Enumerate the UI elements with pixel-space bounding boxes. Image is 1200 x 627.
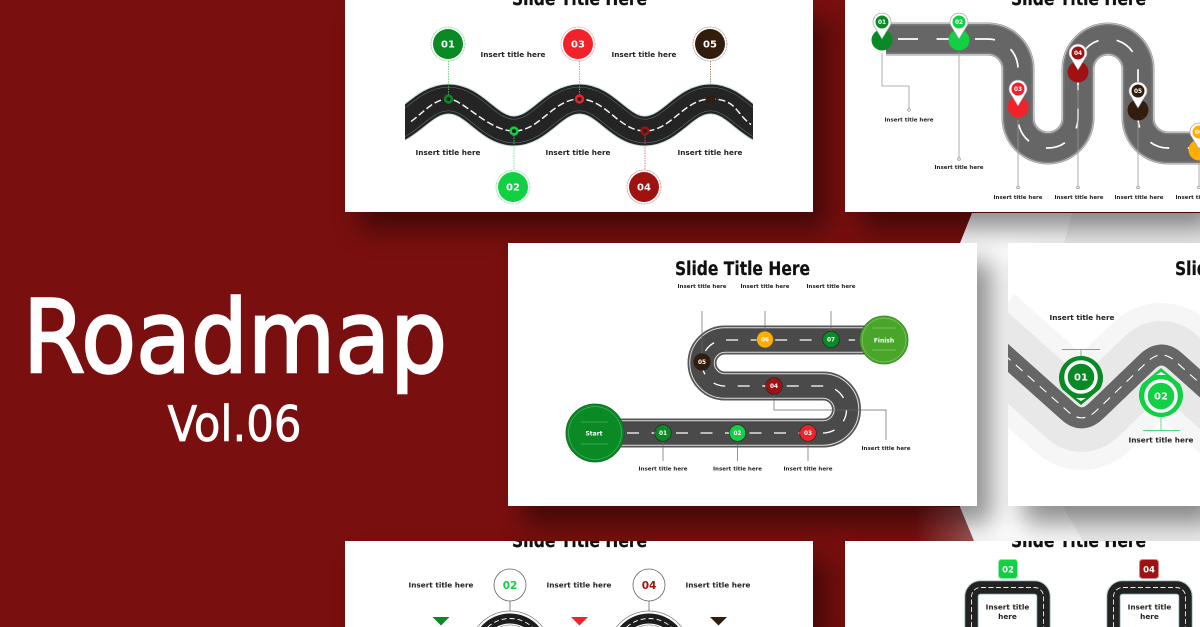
labels [1050, 313, 1194, 444]
circular road 02 [478, 611, 542, 627]
node 03 [800, 425, 816, 441]
labels: Insert title here [1114, 195, 1164, 201]
labels: Insert title here [806, 284, 856, 290]
pin 02 [948, 13, 970, 51]
volume number: Vol.06 [168, 396, 302, 453]
pin 01 [872, 13, 892, 51]
node 01 [655, 425, 671, 441]
leader lines [882, 52, 1199, 187]
badge 02 [496, 170, 530, 204]
frame text 04: Insert title [1128, 602, 1171, 612]
panel: zigzag road slide (right) [1008, 243, 1200, 506]
badge 05 [693, 27, 727, 61]
badge 03 [561, 27, 595, 61]
badge 04 [627, 170, 661, 204]
badge 02 [494, 569, 526, 611]
badge 01: 01 [441, 40, 455, 51]
pin 02 [1139, 368, 1183, 430]
frame text 04 [1128, 602, 1171, 621]
labels: Insert title here [713, 466, 762, 472]
road frame 02 [972, 588, 1044, 627]
S-curve road [595, 340, 884, 433]
start circle: Start [585, 430, 603, 438]
labels: Insert title here [1128, 436, 1194, 444]
node 02 [729, 425, 746, 441]
triangle markers [432, 617, 727, 626]
labels: Insert title here [994, 195, 1043, 201]
labels: Insert title here [612, 50, 677, 59]
tag 04: 04 [1143, 566, 1155, 576]
node 07 [823, 331, 839, 348]
labels: Insert title here [784, 466, 833, 472]
badge 04 [633, 569, 665, 611]
labels: Insert title here [546, 148, 611, 157]
badge 04: 04 [642, 580, 656, 592]
panel: wavy road slide [345, 0, 813, 212]
panel: framed road slide (bottom right) [845, 541, 1200, 627]
winding road [886, 39, 1200, 148]
panel: circular road slide (bottom left) [345, 541, 813, 627]
heading: Roadmap Vol.06 [23, 278, 447, 453]
pin 02: 02 [955, 20, 963, 26]
node 04: 04 [770, 384, 778, 390]
pin 04: 04 [1074, 51, 1082, 57]
node 05 [694, 354, 710, 370]
tag 02 [998, 560, 1018, 578]
labels: Insert title here [740, 284, 790, 290]
badge 04: 04 [637, 183, 651, 194]
node 06: 06 [761, 338, 769, 344]
circular road 04 [616, 611, 682, 627]
badge 05: 05 [703, 40, 717, 51]
labels: Insert title here [1054, 195, 1104, 201]
leader end dots [908, 109, 1200, 189]
labels: Insert title here [546, 581, 612, 590]
pin 01: 01 [878, 20, 886, 26]
labels: Insert title here [1050, 313, 1115, 322]
finish circle: Finish [874, 338, 894, 344]
frame text 02 [986, 602, 1029, 621]
labels: Insert title here [480, 50, 546, 59]
pin 05: 05 [1134, 89, 1142, 95]
node 04 [766, 378, 782, 394]
road frame 04 [1114, 588, 1186, 627]
pin 03: 03 [1014, 87, 1022, 93]
frame text 04: here [1140, 612, 1159, 621]
labels [884, 118, 1200, 201]
node 06 [757, 331, 773, 348]
badge 03: 03 [571, 40, 585, 51]
labels: Insert title here [678, 284, 727, 290]
node 02: 02 [733, 431, 742, 437]
frame text 02: here [998, 612, 1017, 621]
labels [408, 581, 751, 590]
pin 02: 02 [1154, 392, 1168, 403]
labels [416, 50, 743, 157]
node 05: 05 [698, 360, 706, 366]
panel: winding grey road slide [845, 0, 1200, 212]
pin 01: 01 [1074, 373, 1088, 384]
pin 03 [1008, 80, 1028, 118]
finish circle [860, 316, 908, 364]
labels: Insert title here [934, 165, 984, 171]
frame text 02: Insert title [986, 602, 1029, 612]
slide title: Slide Title Here [675, 259, 810, 280]
labels: Insert title here [884, 118, 934, 124]
tag 02: 02 [1002, 566, 1014, 576]
tag 04 [1140, 560, 1158, 578]
labels: Insert title here [408, 581, 474, 590]
badge 02: 02 [503, 580, 517, 592]
road markers [445, 96, 714, 134]
connector lines [448, 61, 710, 170]
labels: Insert title here [862, 446, 911, 452]
badge 01 [431, 27, 465, 61]
labels [638, 284, 911, 472]
node 01: 01 [659, 431, 667, 437]
pin 01 [1059, 350, 1103, 405]
pin 05 [1128, 82, 1148, 120]
title word: Roadmap [23, 278, 447, 396]
wavy road [382, 99, 776, 131]
node 03: 03 [804, 431, 812, 437]
badge 02: 02 [506, 183, 520, 194]
labels: Insert title here [638, 466, 688, 472]
zigzag road with bands [980, 333, 1200, 437]
labels: Insert title here [416, 148, 481, 157]
panel: S-curve road slide (centre) [508, 243, 977, 506]
leader lines [663, 311, 886, 461]
pin 06 [1188, 123, 1200, 160]
labels: Insert title here [686, 581, 751, 590]
labels: Insert title here [678, 148, 743, 157]
start circle [566, 404, 624, 462]
pin 04 [1068, 44, 1088, 82]
node 07: 07 [827, 338, 835, 344]
